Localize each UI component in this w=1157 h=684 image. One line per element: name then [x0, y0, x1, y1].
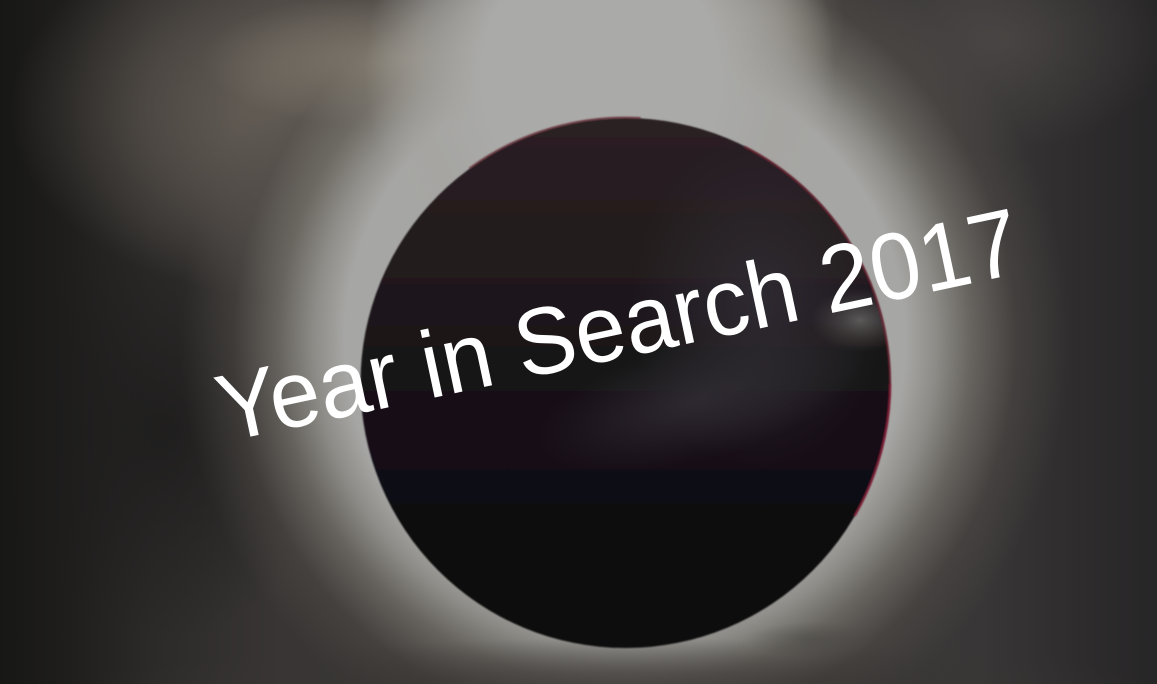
- eclipse moon disc: [360, 116, 892, 649]
- title: Year in Search 2017: [207, 189, 1029, 463]
- red chromosphere rim: [470, 118, 890, 515]
